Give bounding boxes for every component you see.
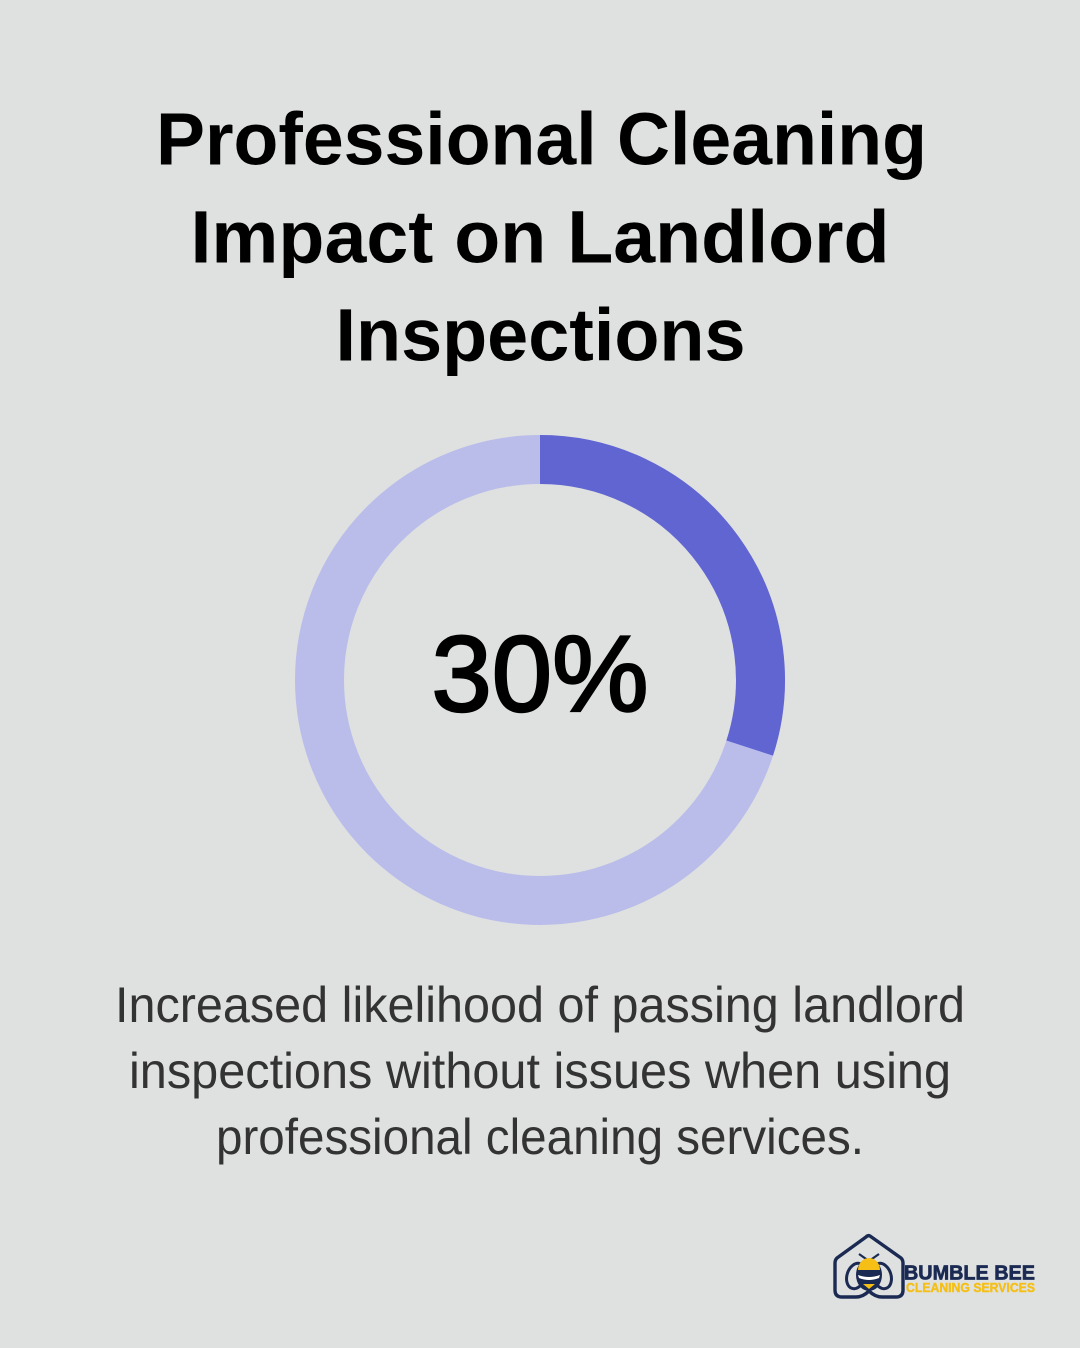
description text: professional cleaning services. xyxy=(216,1109,864,1165)
title: Impact on Landlord xyxy=(190,196,890,278)
description text xyxy=(115,977,965,1165)
percentage value: 30% xyxy=(432,613,648,734)
description text: Increased likelihood of passing landlord xyxy=(115,977,965,1033)
icon: house with bee xyxy=(835,1236,903,1297)
logo tagline: CLEANING SERVICES xyxy=(906,1281,1035,1295)
title xyxy=(156,98,927,376)
logo: Bumble Bee Cleaning Services xyxy=(835,1236,1035,1297)
donut chart: 30% xyxy=(320,460,760,900)
logo wordmark: BUMBLE BEE xyxy=(904,1262,1035,1284)
title: Inspections xyxy=(336,294,746,376)
title: Professional Cleaning xyxy=(156,98,927,180)
description text: inspections without issues when using xyxy=(129,1043,951,1099)
